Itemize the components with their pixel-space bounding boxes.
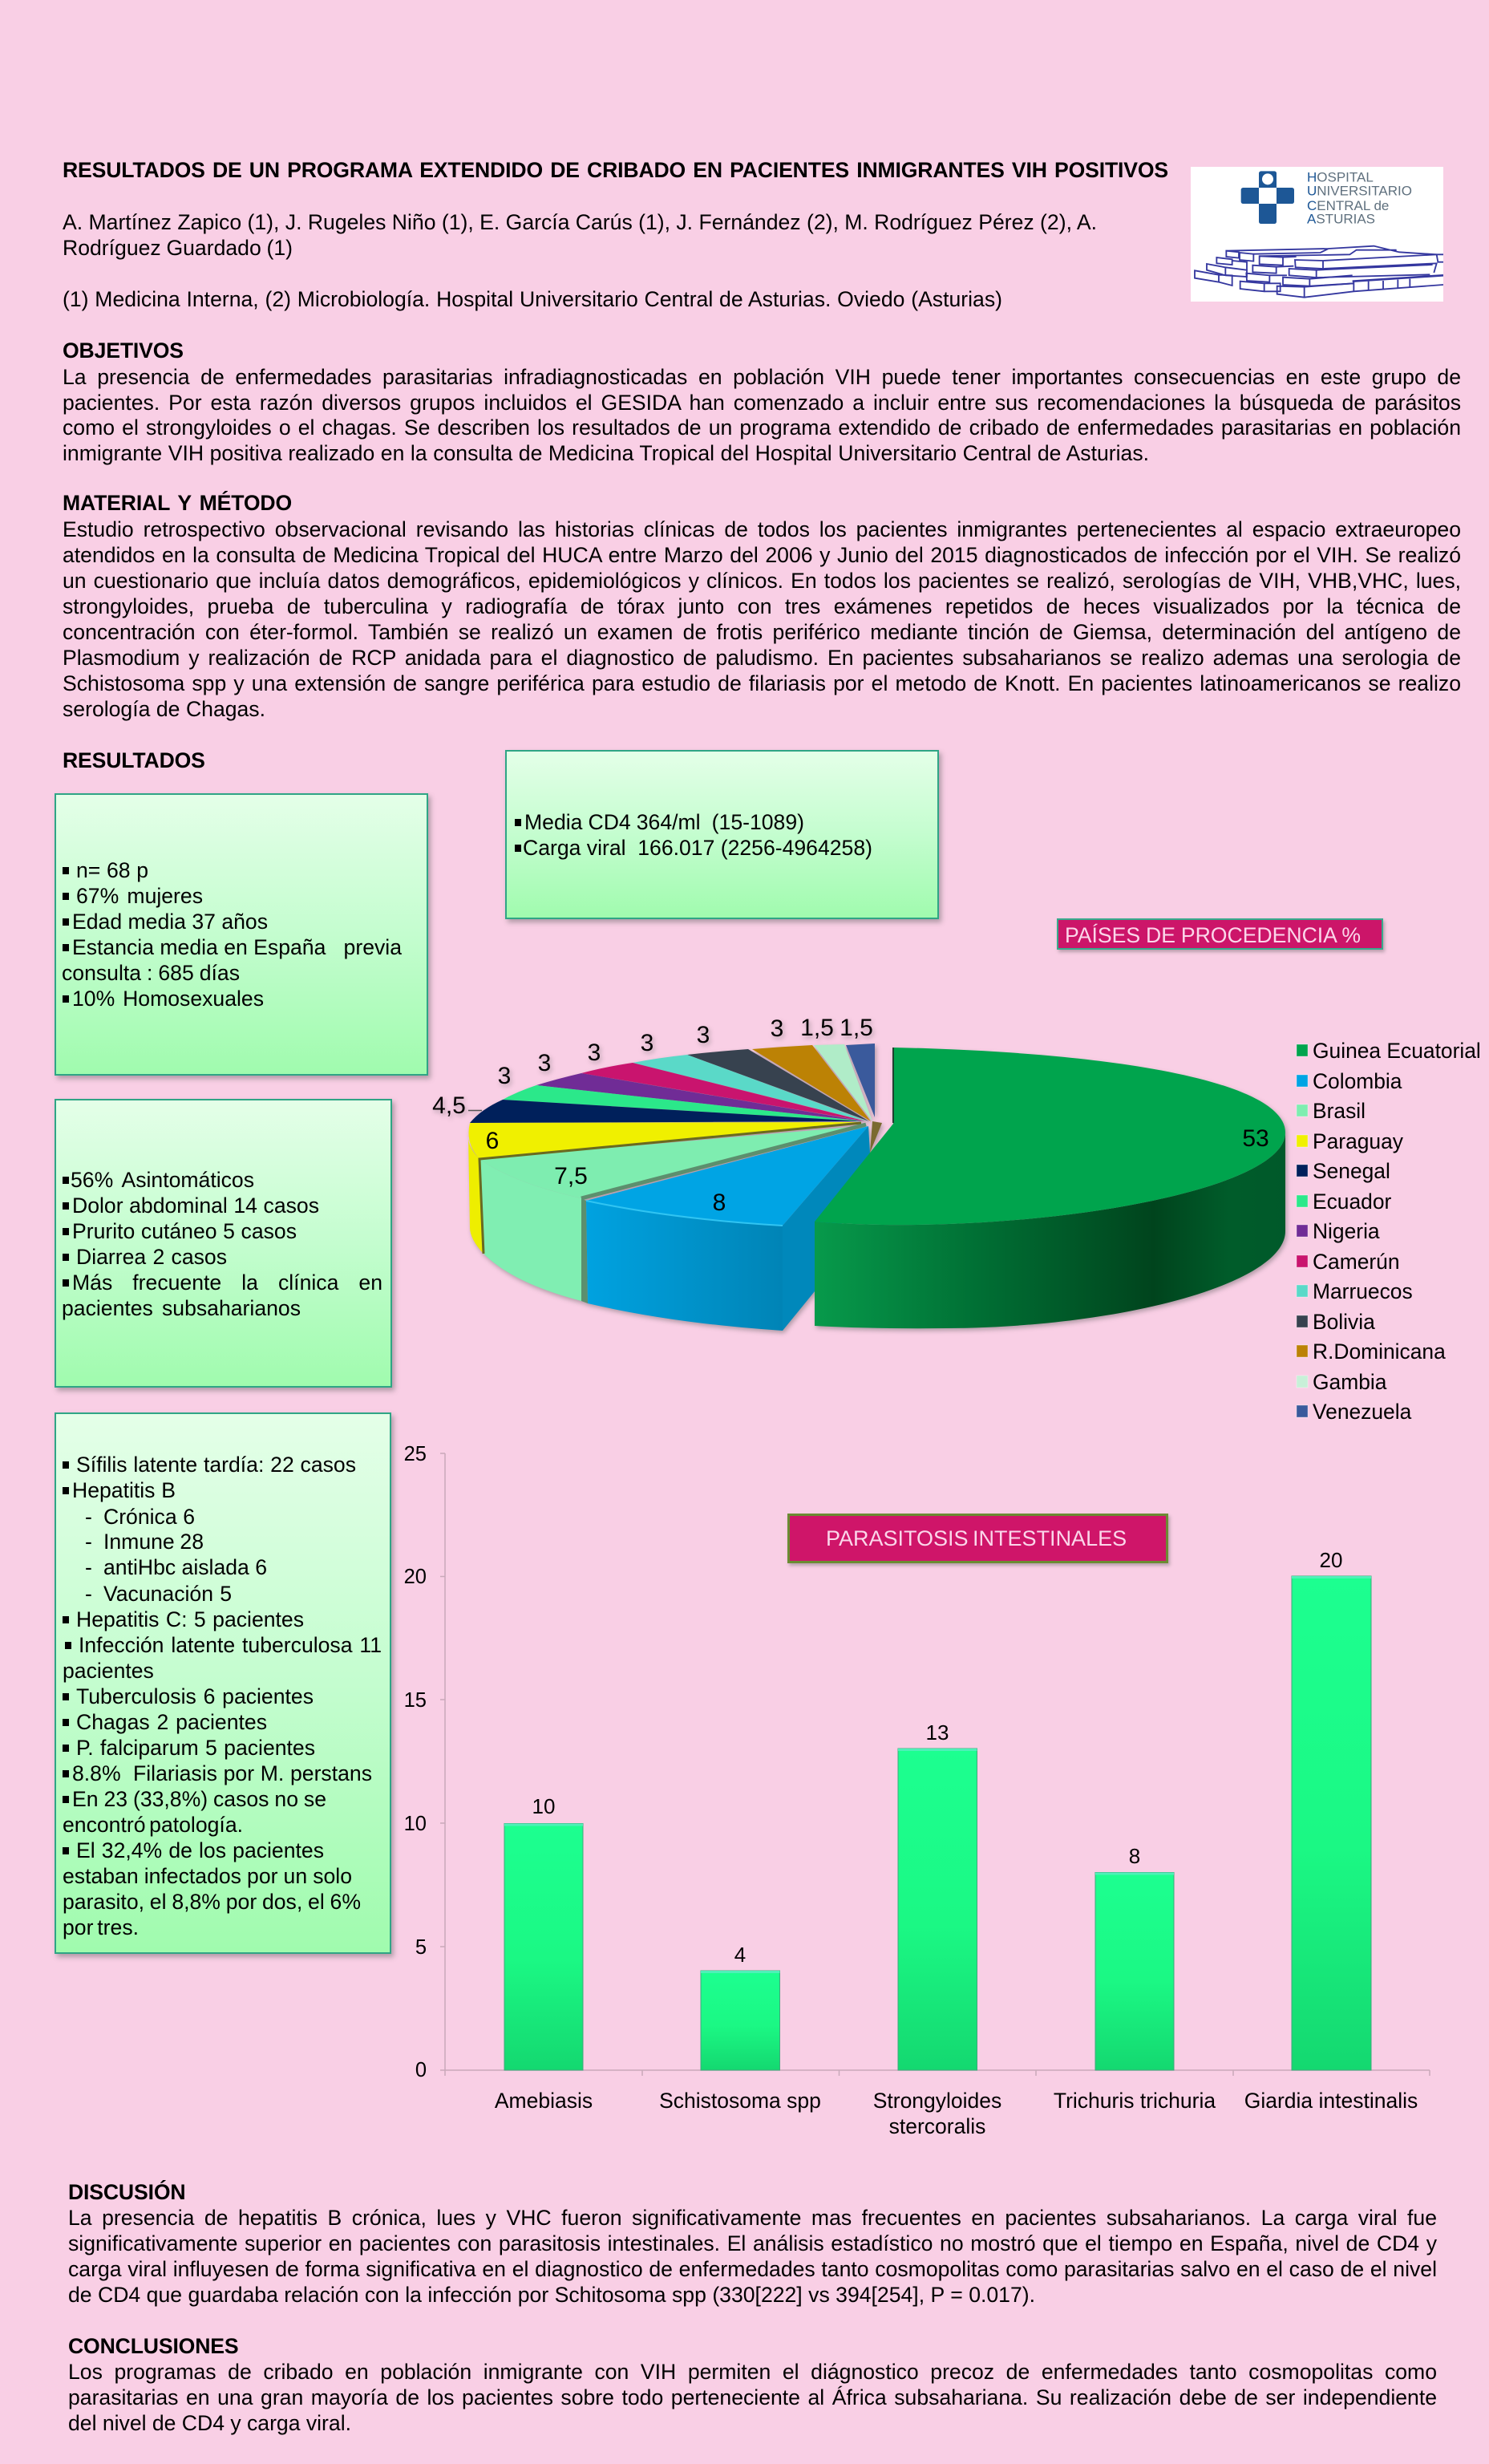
panel: demographics: 67% mujeres <box>76 884 203 908</box>
panel: symptoms: Prurito cutáneo 5 casos <box>72 1219 297 1243</box>
panel: diagnoses: estaban infectados por un solo <box>63 1864 352 1888</box>
pie data labels <box>432 1015 1269 1216</box>
text block: material y método: Schistosoma spp y una extensión de sangre periférica para estudio de filariasis por el metodo de Knott. En pacientes latinoamericanos se realizo <box>63 671 1461 695</box>
panel: diagnoses: Hepatitis C: 5 pacientes <box>76 1607 304 1631</box>
pie legend: Brasil <box>1313 1099 1366 1123</box>
y axis labels: 25 <box>404 1443 427 1465</box>
text block: discusión: de CD4 que guardaba relación con la infección por Schitosoma spp (330[222] vs 394[254], P = 0.017). <box>68 2283 1035 2307</box>
pie legend <box>1296 1039 1481 1424</box>
heading: material y método: MATERIAL Y MÉTODO <box>63 491 292 515</box>
text block: discusión: significativamente superior en pacientes con parasitosis intestinales. El análisis estadístico no mostró que el tiempo en España, nivel de CD4 y <box>68 2231 1437 2255</box>
authors: Rodríguez Guardado (1) <box>63 236 293 260</box>
logo: Hospital Universitario Central de Asturias: ASTURIAS <box>1307 212 1375 227</box>
wedge: Venezuela <box>846 1044 875 1117</box>
text block: conclusiones <box>68 2360 1437 2435</box>
bar: Schistosoma spp: 4 <box>734 1943 746 1967</box>
x axis labels: Trichuris trichuria <box>1054 2089 1216 2113</box>
y axis labels: 0 <box>415 2059 427 2081</box>
panel: diagnoses: por tres. <box>63 1915 139 1939</box>
wedge: Nigeria <box>536 1073 864 1121</box>
panel: diagnoses: Hepatitis B <box>72 1478 176 1502</box>
panel: diagnoses: Infección latente tuberculosa 11 <box>79 1633 382 1657</box>
panel: diagnoses: Tuberculosis 6 pacientes <box>76 1684 314 1708</box>
text block: material y método: serología de Chagas. <box>63 697 265 721</box>
pie data labels: 3 <box>641 1030 653 1056</box>
pie data labels: 4,5 <box>432 1092 466 1119</box>
text block: conclusiones: del nivel de CD4 y carga viral. <box>68 2411 351 2435</box>
text block: discusión <box>68 2206 1437 2307</box>
panel: diagnoses: - <box>85 1582 92 1606</box>
x axis labels: Giardia intestinalis <box>1244 2089 1418 2113</box>
symptoms list <box>62 1168 382 1320</box>
text block: conclusiones: Los programas de cribado en población inmigrante con VIH permiten el diágnostico precoz de enfermedades tanto cosmopolitas como <box>68 2360 1437 2384</box>
panel: symptoms <box>55 1099 392 1388</box>
x axis labels: stercoralis <box>889 2114 985 2138</box>
panel: diagnoses: 8.8% Filariasis por M. perstans <box>72 1761 372 1785</box>
panel: diagnoses: Chagas 2 pacientes <box>76 1710 267 1734</box>
wedge: Colombia <box>586 1126 870 1331</box>
y axis labels: 10 <box>404 1813 427 1835</box>
heading: resultados: RESULTADOS <box>63 748 205 772</box>
y axis labels: 5 <box>415 1936 427 1959</box>
x axis labels <box>495 2089 1418 2138</box>
pie legend: Colombia <box>1313 1069 1402 1093</box>
panel: diagnoses: - <box>85 1555 92 1579</box>
panel: symptoms: 56% Asintomáticos <box>71 1168 254 1192</box>
pie legend: Bolivia <box>1313 1310 1375 1334</box>
heading tag: países de procedencia: PAÍSES DE PROCEDENCIA % <box>1065 923 1361 947</box>
panel: symptoms: Diarrea 2 casos <box>76 1245 227 1269</box>
text block: conclusiones: parasitarias en una gran mayoría de los pacientes sobre todo perteneciente al África subsahariana. Su realización debe de ser independiente <box>68 2385 1437 2409</box>
pie data labels: 3 <box>498 1063 511 1089</box>
wedge: Ecuador <box>503 1085 863 1121</box>
chart axes <box>440 1453 1430 2076</box>
text block: objetivos: pacientes. Por esta razón diversos grupos incluidos el GESIDA han comenzado a incluir entre sus recomendaciones la búsqueda de parásitos <box>63 391 1461 415</box>
panel: symptoms: Dolor abdominal 14 casos <box>72 1194 319 1218</box>
panel: diagnoses: El 32,4% de los pacientes <box>76 1838 324 1862</box>
wedge: Marruecos <box>633 1055 868 1121</box>
panel: diagnoses: pacientes <box>63 1659 154 1683</box>
text block: material y método: concentración con éter-formol. También se realizó un examen de frotis periférico mediante tinción de Giemsa, determinación del antígeno de <box>63 620 1461 644</box>
text block: material y método: Plasmodium y realización de RCP anidada para el diagnostico de paludismo. En pacientes subsaharianos se realizo ademas una serologia de <box>63 646 1461 670</box>
heading: discusión: DISCUSIÓN <box>68 2180 185 2204</box>
logo: Hospital Universitario Central de Asturias <box>1191 167 1443 302</box>
pie legend: Marruecos <box>1313 1279 1413 1303</box>
pie legend: Guinea Ecuatorial <box>1313 1039 1481 1063</box>
heading: objetivos: OBJETIVOS <box>63 338 184 363</box>
pie data labels: 6 <box>486 1128 499 1154</box>
panel: demographics: Estancia media en España previa <box>72 935 402 959</box>
panel: diagnoses: antiHbc aislada 6 <box>103 1555 267 1579</box>
bar: Trichuris trichuria: 8 <box>1129 1844 1140 1868</box>
panel: demographics: Edad media 37 años <box>72 910 268 934</box>
bar: Giardia intestinalis: 20 <box>1320 1548 1342 1572</box>
bar: Strongyloides stercoralis <box>898 1720 977 2070</box>
y axis labels: 20 <box>404 1566 427 1588</box>
panel: diagnoses: - <box>85 1530 92 1554</box>
panel: CD4 and viral load: Carga viral 166.017 (2256-4964258) <box>523 836 872 860</box>
bar: Amebiasis <box>504 1794 583 2070</box>
text block: material y método: strongyloides, prueba de tuberculina y radiografía de tórax junto con tres exámenes repetidos de heces visualizados por la técnica de <box>63 594 1461 618</box>
bar: Trichuris trichuria <box>1095 1844 1174 2070</box>
logo: Hospital Universitario Central de Asturias: UNIVERSITARIO <box>1307 184 1412 199</box>
bar chart: parasitosis intestinales <box>404 1443 1430 2138</box>
wedge: Gambia <box>814 1044 872 1121</box>
pie data labels: 3 <box>538 1050 551 1076</box>
text block: objetivos: La presencia de enfermedades parasitarias infradiagnosticadas en población VIH puede tener importantes consecuencias en este grupo de <box>63 365 1461 389</box>
wedge: Paraguay <box>468 1122 861 1254</box>
text block: objetivos: como el strongyloides o el chagas. Se describen los resultados de un programa extendido de cribado de enfermedades parasitarias en población <box>63 415 1461 440</box>
CD4 and viral load list <box>515 810 872 860</box>
pie data labels: 3 <box>588 1040 601 1066</box>
x axis labels: Strongyloides <box>873 2089 1001 2113</box>
panel: diagnoses: Crónica 6 <box>103 1505 195 1529</box>
panel: demographics: n= 68 p <box>76 858 148 882</box>
demographics list <box>62 858 403 1011</box>
pie legend: Nigeria <box>1313 1219 1380 1243</box>
pie data labels: 1,5 <box>840 1015 873 1041</box>
bar: Giardia intestinalis <box>1292 1548 1371 2070</box>
bar: Schistosoma spp <box>701 1943 779 2070</box>
logo: Hospital Universitario Central de Asturias: CENTRAL de <box>1307 198 1389 213</box>
pie legend: Venezuela <box>1313 1400 1412 1424</box>
pie data labels: 1,5 <box>800 1015 834 1041</box>
text block: material y método <box>63 517 1461 721</box>
panel: diagnoses: Vacunación 5 <box>103 1582 232 1606</box>
heading: conclusiones: CONCLUSIONES <box>68 2334 238 2358</box>
wedge: Senegal <box>470 1100 861 1123</box>
pie legend: Gambia <box>1313 1370 1387 1394</box>
pie legend: Paraguay <box>1313 1129 1404 1153</box>
panel: demographics: consulta : 685 días <box>62 961 240 985</box>
pie data labels: 3 <box>771 1015 783 1042</box>
x axis labels: Amebiasis <box>495 2089 593 2113</box>
heading tag: países de procedencia <box>1057 918 1383 950</box>
bar: Strongyloides stercoralis: 13 <box>926 1720 949 1745</box>
pie legend: Ecuador <box>1313 1189 1392 1214</box>
wedge: Bolivia <box>687 1049 869 1121</box>
wedge: R.Dominicana <box>752 1045 871 1121</box>
bar: Amebiasis: 10 <box>532 1794 555 1818</box>
pie legend: Senegal <box>1313 1159 1390 1183</box>
panel: diagnoses: Sífilis latente tardía: 22 casos <box>76 1453 356 1477</box>
pie legend: Camerún <box>1313 1250 1400 1274</box>
diagnoses list <box>63 1453 382 1939</box>
pie chart: países de procedencia <box>432 1015 1289 1335</box>
panel: demographics: 10% Homosexuales <box>72 987 264 1011</box>
panel: CD4 and viral load <box>505 750 939 919</box>
text block: discusión: La presencia de hepatitis B crónica, lues y VHC fueron significativamente mas frecuentes en pacientes subsaharianos. La carga viral fue <box>68 2206 1437 2230</box>
y axis labels <box>404 1443 427 2081</box>
panel: CD4 and viral load: Media CD4 364/ml (15-1089) <box>524 810 804 834</box>
affiliations: (1) Medicina Interna, (2) Microbiología. Hospital Universitario Central de Asturias. Oviedo (Asturias) <box>63 287 1002 311</box>
text block: objetivos: inmigrante VIH positiva realizado en la consulta de Medicina Tropical del Hospital Universitario Central de Asturias. <box>63 441 1149 465</box>
text block: discusión: carga viral influyesen de forma significativa en el diagnostico de enfermedades tanto cosmopolitas como parasitarias salvo en el caso de el nivel <box>68 2257 1437 2281</box>
heading tag: parasitosis intestinales <box>787 1514 1168 1563</box>
panel: demographics <box>55 793 428 1076</box>
text block: material y método: un cuestionario que incluía datos demográficos, epidemiológicos y clínicos. En todos los pacientes se realizó, serologías de VIH, VHB,VHC, lues, <box>63 569 1461 593</box>
wedge: Guinea Ecuatorial <box>815 1048 1285 1328</box>
text block: material y método: Estudio retrospectivo observacional revisando las historias clínicas de todos los pacientes inmigrantes pertenecientes al espacio extraeuropeo <box>63 517 1461 541</box>
pie data labels: 8 <box>713 1189 726 1216</box>
authors <box>63 210 1097 260</box>
panel: diagnoses <box>55 1412 391 1954</box>
y axis labels: 15 <box>404 1689 427 1712</box>
panel: diagnoses: P. falciparum 5 pacientes <box>76 1736 315 1760</box>
text block: material y método: atendidos en la consulta de Medicina Tropical del HUCA entre Marzo del 2006 y Junio del 2015 diagnosticados de infección por el VIH. Se realizó <box>63 543 1461 567</box>
wedge: Brasil <box>479 1123 866 1303</box>
panel: diagnoses: - <box>85 1505 92 1529</box>
wedge: Camerún <box>581 1063 866 1121</box>
authors: A. Martínez Zapico (1), J. Rugeles Niño (1), E. García Carús (1), J. Fernández (2), M. Rodríguez Pérez (2), A. <box>63 210 1097 234</box>
panel: diagnoses: encontró patología. <box>63 1813 243 1837</box>
heading tag: parasitosis intestinales: PARASITOSIS INTESTINALES <box>826 1526 1127 1550</box>
pie data labels: 7,5 <box>554 1163 588 1189</box>
pie data labels: 3 <box>697 1022 710 1048</box>
logo: Hospital Universitario Central de Asturias: HOSPITAL <box>1307 170 1374 185</box>
text block: objetivos <box>63 365 1461 465</box>
panel: diagnoses: parasito, el 8,8% por dos, el 6% <box>63 1890 361 1914</box>
x axis labels: Schistosoma spp <box>659 2089 821 2113</box>
title: RESULTADOS DE UN PROGRAMA EXTENDIDO DE CRIBADO EN PACIENTES INMIGRANTES VIH POSITIVOS <box>63 158 1168 182</box>
panel: diagnoses: En 23 (33,8%) casos no se <box>72 1787 326 1811</box>
panel: diagnoses: Inmune 28 <box>103 1530 204 1554</box>
pie data labels: 53 <box>1242 1125 1269 1152</box>
panel: symptoms: pacientes subsaharianos <box>62 1296 301 1320</box>
panel: symptoms: Más frecuente la clínica en <box>72 1270 382 1295</box>
pie legend: R.Dominicana <box>1313 1339 1446 1364</box>
